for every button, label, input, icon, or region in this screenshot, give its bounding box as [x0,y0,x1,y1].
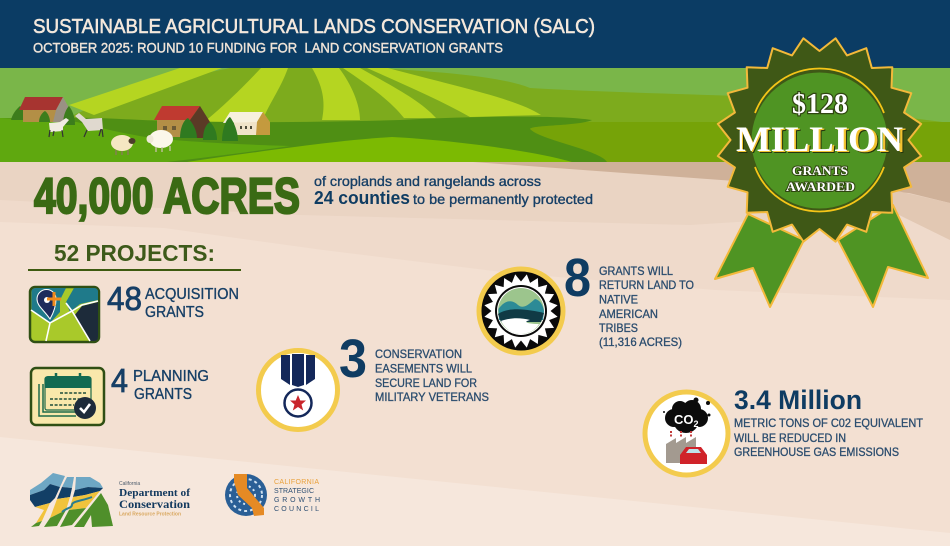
headline: 40,000 acres [34,168,593,224]
headline description: to be permanently protected [413,191,593,207]
grants awarded: AWARDED [786,179,855,194]
goats [49,113,103,137]
starburst seal [718,38,921,242]
bright left meadow [0,118,290,162]
gold ring arcs [755,69,884,211]
stat: 3 conservation easements: CONSERVATION [375,347,462,361]
stat: 48 acquisition grants [107,280,239,321]
stat: 8 grants to tribes: RETURN LAND TO [599,278,694,292]
grants awarded [786,163,855,194]
stat: 3 conservation easements: MILITARY VETERANS [375,390,489,404]
inner green circle [752,72,888,208]
million: MILLION [737,120,906,160]
farmhouse left [11,97,75,125]
stat: 4 planning grants: 4 [111,362,128,399]
title: SUSTAINABLE AGRICULTURAL LANDS CONSERVATION (SALC) [33,16,595,38]
million: MILLION [736,119,903,159]
council text: COUNCIL [274,506,319,513]
stat: 48 acquisition grants: ACQUISITION [145,286,239,303]
department text [119,481,191,518]
stat: 8 grants to tribes: (11,316 ACRES) [599,335,682,349]
grants awarded: GRANTS [792,163,848,178]
icon: calendar [31,368,104,425]
farmland landscape [0,68,950,162]
icon: co2 emissions: CO [674,412,694,427]
stat: 4 planning grants: GRANTS [134,386,192,403]
ribbons [715,205,928,307]
stat: 4 planning grants: PLANNING [133,368,209,385]
department text: California [119,481,140,487]
icon: co2 emissions: 2 [694,419,699,429]
logo: department of conservation [30,473,191,527]
stat: 48 acquisition grants: GRANTS [145,304,204,321]
logo: california strategic growth council [225,474,320,516]
stat: 48 acquisition grants: 48 [107,280,142,317]
projects heading: 52 PROJECTS: [54,240,215,266]
department text: Conservation [119,499,191,511]
background sand bands [0,162,950,546]
award badge [715,38,928,307]
stat: 3.4 million: GREENHOUSE GAS EMISSIONS [734,445,899,459]
icon: military medal [258,350,338,430]
amount: $128 [792,88,848,120]
stat: 8 grants to tribes: GRANTS WILL [599,264,673,278]
headline: 40,000 acres: 40,000 ACRES [34,168,300,224]
icon: co2 emissions [645,392,728,475]
stat: 3.4 million [734,385,924,459]
headline description: of croplands and rangelands across [314,173,541,189]
icon: map with pin [30,287,99,342]
sheep [111,130,173,155]
department text: Department of [119,488,191,499]
farmhouse cream [222,112,270,141]
council text: STRATEGIC [274,488,314,495]
council text: CALIFORNIA [274,479,319,486]
council text: GROWTH [274,497,320,504]
council text [274,479,320,513]
stat: 3 conservation easements [339,329,489,404]
crop stripes [69,68,541,122]
stat: 3.4 million: WILL BE REDUCED IN [734,431,846,445]
stat: 3 conservation easements: EASEMENTS WILL [375,362,472,376]
headline description: 24 counties [314,188,410,208]
bear mark [30,473,113,527]
farmhouse centre [154,106,217,140]
icon: native american tribes seal [479,269,563,353]
dark green hill [0,117,607,162]
million: MILLION [738,121,907,161]
stat: 3.4 million: 3.4 Million [734,385,862,415]
bright foreground field [187,137,572,162]
subtitle: OCTOBER 2025: ROUND 10 FUNDING FOR LAND CONSERVATION GRANTS [33,40,503,56]
stat: 8 grants to tribes: 8 [564,248,591,308]
stat: 8 grants to tribes: NATIVE [599,292,638,306]
headline description [314,173,593,208]
department text: Land Resource Protection [119,512,181,518]
stat: 3.4 million: METRIC TONS OF C02 EQUIVALENT [734,416,924,430]
stat: 8 grants to tribes: TRIBES [599,321,638,335]
header banner [0,0,950,68]
stat: 4 planning grants [111,362,209,403]
stat: 3 conservation easements: SECURE LAND FOR [375,376,477,390]
stat: 8 grants to tribes: AMERICAN [599,307,658,321]
stat: 8 grants to tribes [564,248,694,349]
stat: 3 conservation easements: 3 [339,329,367,389]
